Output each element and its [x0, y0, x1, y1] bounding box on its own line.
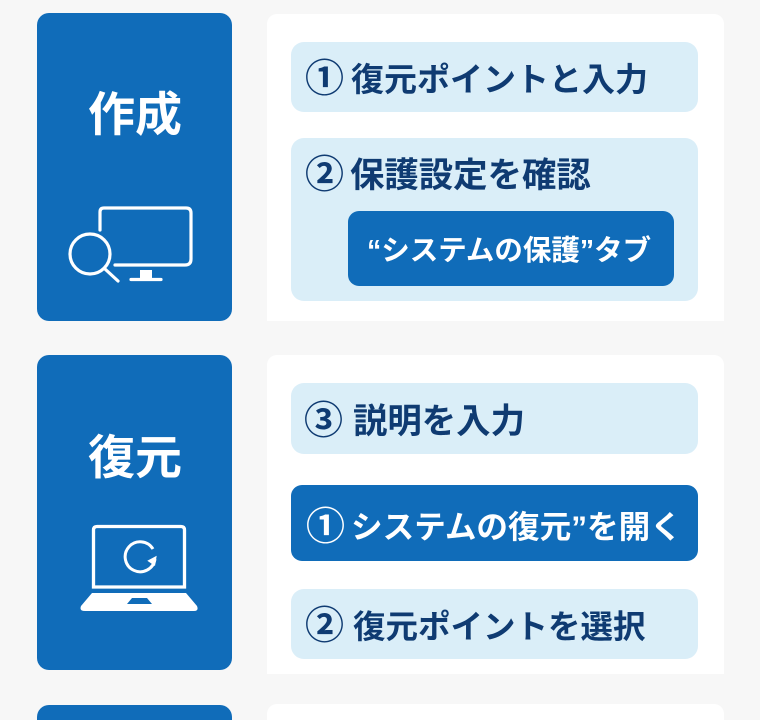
step label: 説明を入力	[353, 403, 525, 441]
panel: third steps	[267, 704, 724, 720]
step label: 復元ポイントを選択	[353, 609, 646, 645]
step: create 1	[291, 42, 698, 112]
step: restore 1 highlighted	[291, 485, 698, 561]
step: create 2	[291, 138, 698, 301]
icon: monitor with magnifier	[68, 206, 193, 283]
heading: create: 作成	[88, 88, 182, 141]
step number: ②	[305, 605, 344, 648]
step: restore 3	[291, 383, 698, 454]
heading: restore: 復元	[88, 431, 182, 484]
icon: laptop with refresh arrow	[80, 524, 198, 611]
panel: restore steps	[267, 355, 724, 674]
step number: ③	[304, 400, 343, 443]
panel: third sidebar	[37, 705, 232, 720]
step label: システムの復元”を開く	[351, 509, 682, 545]
tab button	[348, 211, 674, 286]
tab label: “システムの保護”タブ	[367, 235, 651, 267]
step label: 復元ポイントと入力	[351, 61, 648, 98]
panel: create steps	[267, 14, 724, 321]
step label: 保護設定を確認	[350, 157, 591, 195]
step number: ②	[305, 154, 344, 197]
panel: restore sidebar	[37, 355, 232, 670]
step number: ①	[305, 58, 344, 101]
panel: create sidebar	[37, 13, 232, 321]
step number: ①	[306, 506, 345, 549]
step: restore 2	[291, 589, 698, 659]
